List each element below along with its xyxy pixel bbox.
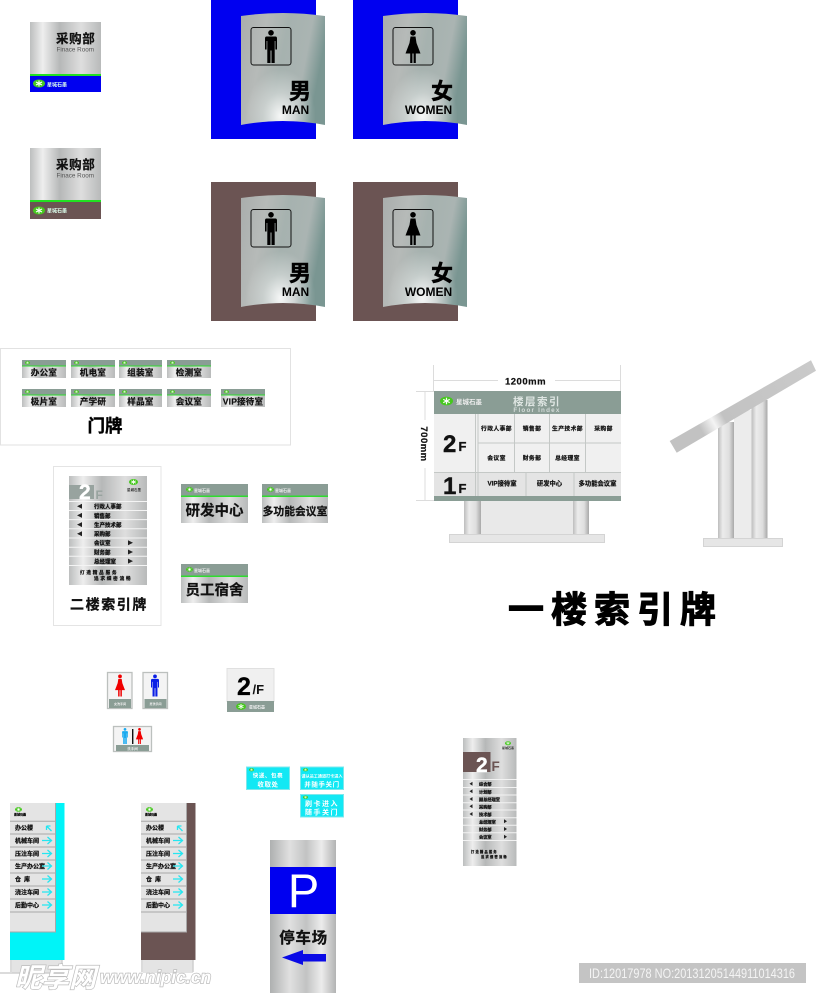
restroom plate: woman on brown: WOMEN [405, 285, 452, 299]
panel: second floor index sign: 销售部 [94, 512, 111, 520]
floor number sign 2/F [227, 668, 274, 712]
panel: second floor index sign: 二楼索引牌 [70, 596, 148, 612]
first floor index board: 总经理室 [555, 454, 580, 462]
wayfinding totem: cyan: 仓库 [15, 876, 33, 884]
dimension: 1200mm width: 1200mm [505, 376, 546, 388]
tall floor sign with brown 2F [463, 738, 516, 866]
panel: door plates: 检测室 [176, 367, 202, 377]
wayfinding totem: brown: 生产办公室 [146, 862, 176, 870]
wayfinding totem: cyan: 星城石墨 [14, 812, 26, 816]
panel: second floor index sign: 行政人事部 [94, 503, 122, 511]
first floor index board: 2 [443, 431, 456, 458]
tall floor sign with brown 2F: 追求细密流畅 [481, 854, 508, 859]
cyan notice: swipe card and close door, long [300, 767, 344, 790]
tall floor sign with brown 2F: 2 [476, 754, 488, 777]
watermark: site logo: www.nipic.cn [100, 967, 211, 987]
wayfinding totem: cyan: 生产办公室 [15, 862, 45, 870]
wayfinding totem: cyan: 办公楼 [15, 824, 33, 832]
first floor index board: 楼层索引 [513, 395, 561, 408]
dimension: 700mm height: 700mm [418, 426, 429, 462]
panel: door plates: 样品室 [127, 396, 154, 406]
restroom plate: man on brown: MAN [282, 285, 309, 299]
restroom plate: man on blue: MAN [282, 103, 309, 117]
restroom plate: woman on blue: 女 [431, 79, 453, 104]
panel: door plates: 办公室 [31, 367, 57, 377]
restroom plate: man on blue [211, 0, 325, 139]
tall floor sign with brown 2F: 星城石墨 [502, 745, 514, 750]
parking pole sign: P [288, 864, 319, 917]
sign: multifunction meeting room: 多功能会议室 [263, 504, 328, 518]
watermark: site logo: 昵享网 [15, 963, 100, 993]
sign: purchasing department, brown base [30, 148, 101, 219]
first floor index board: 多功能会议室 [579, 478, 616, 488]
tall floor sign with brown 2F: 总经理室 [479, 818, 496, 824]
dimension: 1200mm width [434, 365, 620, 391]
first floor index board: 星城石墨 [456, 397, 482, 406]
sign: staff dormitory: 星城石墨 [194, 567, 210, 573]
sign: staff dormitory: 员工宿舍 [186, 581, 244, 599]
parking pole sign: 停车场 [279, 928, 328, 947]
dimension: 700mm height [416, 391, 434, 500]
restroom plate: man on brown: 男 [289, 261, 311, 286]
panel: door plates: 机电室 [80, 367, 106, 377]
restroom sign: blue man: 男洗手间 [149, 701, 162, 706]
first floor index board: 财务部 [523, 454, 541, 462]
panel: door plates: 门牌 [88, 416, 122, 436]
panel: second floor index sign: 追求细密流畅 [94, 575, 132, 582]
wayfinding totem: brown: 机械车间 [146, 837, 170, 845]
panel: second floor index sign: 财务部 [94, 548, 111, 556]
first floor index board [434, 391, 621, 542]
restroom sign: red woman: 女洗手间 [114, 701, 126, 706]
first floor index board: Floor Index [513, 407, 561, 414]
cyan notice: courier pickup: 收取处 [257, 780, 279, 788]
first floor index board: 1 [443, 473, 456, 500]
watermark: site logo [15, 963, 211, 993]
first floor index board: 行政人事部 [481, 424, 512, 432]
wayfinding totem: cyan: 压注车间 [15, 850, 39, 858]
tall floor sign with brown 2F: 技术部 [479, 811, 492, 818]
sign: staff dormitory [181, 564, 248, 603]
wayfinding totem: brown: 压注车间 [146, 850, 170, 858]
first floor index board: F [458, 481, 466, 496]
restroom plate: man on brown [211, 182, 325, 321]
wayfinding totem: brown: 星城石墨 [145, 812, 157, 816]
restroom plate: woman on brown [353, 182, 467, 321]
sign: purchasing department, blue base: Finace Room [56, 46, 94, 54]
wayfinding totem: brown: 办公楼 [146, 824, 164, 832]
wayfinding totem: cyan: 浇注车间 [15, 888, 39, 896]
panel: second floor index sign: 总经理室 [94, 558, 117, 566]
wayfinding totem: cyan: 机械车间 [15, 837, 39, 845]
side view of index board [670, 360, 816, 546]
wayfinding totem: brown: 后勤中心 [146, 902, 170, 910]
first floor index board: 采购部 [594, 424, 613, 432]
panel: door plates: 极片室 [31, 396, 57, 406]
panel: door plates: 产学研 [80, 396, 106, 406]
panel: door plates: VIP接待室 [223, 396, 263, 406]
first floor index board: F [458, 439, 466, 454]
restroom plate: woman on brown: 女 [431, 261, 453, 286]
panel: second floor index sign: 2 [79, 481, 91, 504]
panel: second floor index sign: 星城石墨 [127, 487, 141, 492]
panel: second floor index sign [54, 466, 161, 626]
restroom sign: combined: 洗手间 [127, 746, 138, 751]
sign: multifunction meeting room: 星城石墨 [275, 487, 291, 493]
tall floor sign with brown 2F: 打造精品服务 [471, 849, 498, 854]
panel: second floor index sign: F [96, 488, 103, 502]
cyan notice: swipe card and close door, long: 并随手关门 [304, 780, 340, 788]
panel: second floor index sign: 会议室 [94, 539, 111, 547]
panel: second floor index sign: 生产技术部 [94, 521, 122, 529]
wayfinding totem: cyan: 后勤中心 [15, 902, 39, 910]
tall floor sign with brown 2F: 会议室 [479, 834, 492, 841]
restroom sign: combined [114, 726, 152, 752]
tall floor sign with brown 2F: F [492, 759, 500, 774]
sign: purchasing department, blue base [30, 22, 101, 92]
cyan notice: swipe card and close door, short: 随手关门 [305, 808, 339, 816]
cyan notice: swipe card and close door, long: 请从员工通道打卡进入 [302, 772, 342, 778]
tall floor sign with brown 2F: 采购部 [479, 803, 492, 810]
tall floor sign with brown 2F: 计划部 [479, 788, 492, 795]
cyan notice: swipe card and close door, short [300, 794, 344, 817]
cyan notice: courier pickup [246, 767, 290, 790]
sign: multifunction meeting room [262, 484, 328, 523]
wayfinding totem: brown [141, 803, 196, 973]
sign: research centre [181, 484, 248, 523]
first floor index board: 研发中心 [537, 478, 563, 488]
first floor index board: 会议室 [487, 454, 506, 462]
tall floor sign with brown 2F: 副总经理室 [479, 796, 500, 803]
restroom sign: blue man [143, 672, 168, 708]
floor number sign 2/F: 星城石墨 [249, 704, 265, 710]
panel: door plates: 会议室 [176, 396, 202, 406]
sign: purchasing department, blue base: 采购部 [56, 31, 95, 46]
floor number sign 2/F: /F [252, 682, 264, 697]
restroom sign: red woman [108, 672, 132, 708]
sign: purchasing department, brown base: Finace Room [56, 172, 94, 180]
panel: door plates [0, 348, 290, 445]
floor number sign 2/F: 2 [237, 673, 251, 701]
wayfinding totem: brown: 浇注车间 [146, 888, 170, 896]
panel: door plates: 组装室 [127, 367, 154, 377]
sign: research centre: 星城石墨 [194, 487, 210, 493]
restroom plate: woman on blue: WOMEN [405, 103, 452, 117]
restroom plate: woman on blue [353, 0, 467, 139]
wayfinding totem: brown: 仓库 [146, 876, 164, 884]
parking pole sign [270, 840, 336, 993]
sign: purchasing department, blue base: 星城石墨 [47, 82, 67, 88]
sign: research centre: 研发中心 [186, 502, 244, 520]
first floor index board: 销售部 [523, 424, 541, 432]
tall floor sign with brown 2F: 财务部 [479, 826, 492, 833]
sign: purchasing department, brown base: 采购部 [56, 157, 95, 172]
first floor index board: 生产技术部 [552, 424, 583, 432]
tall floor sign with brown 2F: 综合部 [479, 781, 492, 788]
sign: purchasing department, brown base: 星城石墨 [47, 208, 67, 214]
cyan notice: swipe card and close door, short: 刷卡进入 [305, 799, 339, 808]
panel: second floor index sign: 打造精品服务 [80, 569, 118, 576]
cyan notice: courier pickup: 快递、包裹 [253, 772, 283, 780]
panel: second floor index sign: 采购部 [94, 530, 111, 538]
wayfinding totem: cyan [0, 803, 64, 973]
first floor index board: VIP接待室 [487, 478, 517, 488]
restroom plate: man on blue: 男 [289, 79, 311, 104]
title: first floor index sign: 一楼索引牌 [508, 589, 723, 630]
